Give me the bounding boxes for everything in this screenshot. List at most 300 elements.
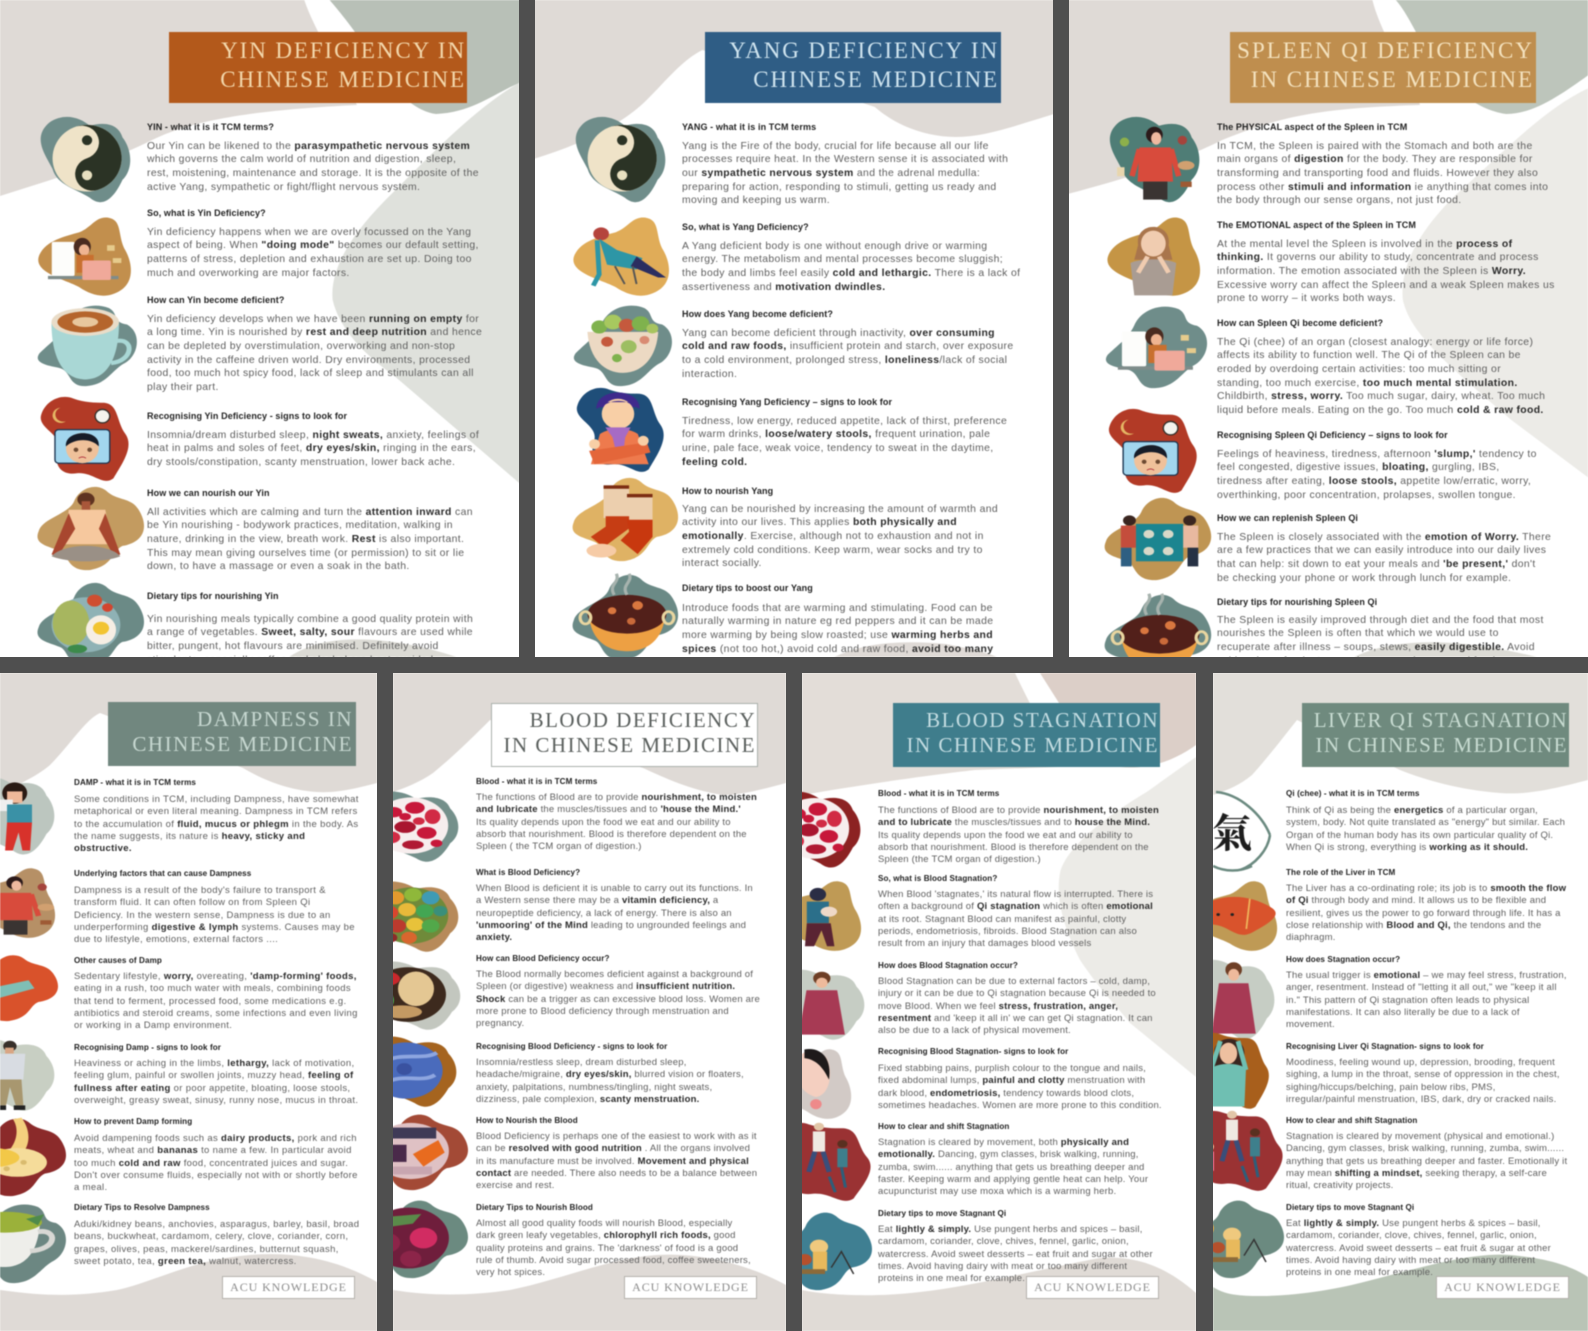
text block: what is blood deficiency: anxiety. bbox=[476, 932, 512, 943]
text block: what it is: Yang is the Fire of the body, crucial for life because all our life bbox=[682, 140, 989, 152]
text block: signs: tiredness after eating, loose stools, appetite low/erratic, worry, bbox=[1217, 476, 1531, 487]
text block: what is yin deficiency: Yin deficiency happens when we are overly focussed on the Yang bbox=[147, 226, 471, 238]
text block: dietary tips: beans, buckwheat, cardamom, celery, clove, coriander, corn, bbox=[74, 1231, 348, 1242]
text block: dietary tips: The Spleen is easily improved through diet and the food that most bbox=[1217, 614, 1544, 626]
text block: what it is bbox=[74, 778, 359, 854]
text block: what it is: Its quality depends upon the food we eat and our ability to bbox=[476, 817, 731, 828]
text block: signs: fullness after eating or poor appetite, bloating, loose stools, bbox=[74, 1083, 350, 1094]
icon: Qi character bbox=[1212, 792, 1270, 870]
text block: how deficient: a long time. Yin is nourished by rest and deep nutrition and hence bbox=[147, 327, 482, 338]
text block: dietary tips: Introduce foods that are warming and stimulating. Food can be bbox=[682, 602, 993, 614]
text block: emotional aspect: thinking. It governs our ability to study, concentrate and process bbox=[1217, 252, 1539, 263]
text block: how occur: resentment and 'keep it all in' we can get Qi stagnation. It can bbox=[878, 1013, 1153, 1024]
text block: what is blood deficiency: 'unmooring' of the Mind leading to ungrounded feelings and bbox=[476, 920, 746, 931]
text block: underlying factors: underperforming digestive & lymph systems. Causes may be bbox=[74, 922, 355, 933]
text block: nourish: Blood Deficiency is perhaps one of the easiest to work with as it bbox=[476, 1131, 757, 1142]
text block: dietary tips: grapes, olives, peas, mackerel/sardines, butternut squash, bbox=[74, 1244, 339, 1255]
text block: dietary tips bbox=[682, 583, 994, 655]
text block: signs: sometimes headaches. Women are more prone to this condition. bbox=[878, 1100, 1162, 1111]
text block: clear and shift: emotionally. Dancing, gym classes, brisk walking, running, bbox=[878, 1149, 1139, 1160]
text block: other causes: or working in a Damp environment. bbox=[74, 1020, 232, 1031]
icon: person sneezing bbox=[0, 777, 54, 854]
text block: signs bbox=[74, 1043, 358, 1106]
text block: other causes bbox=[74, 956, 358, 1031]
text block: signs: irregular/painful menstruation, IBS, dark, dry or cracked nails. bbox=[1286, 1094, 1556, 1105]
icon: family meal table bbox=[1105, 498, 1211, 580]
text block: what is blood stagnation: So, what is Blood Stagnation? bbox=[878, 874, 997, 883]
text block: signs: overthinking, poor concentration, prolapses, swollen tongue. bbox=[1217, 490, 1516, 501]
text block: role of the liver: resilient, gives us the power to go forward through life. It has a bbox=[1286, 908, 1561, 919]
text block: nourish: can be resolved with good nutrition . All the organs involved bbox=[476, 1143, 750, 1154]
text block: other causes: Other causes of Damp bbox=[74, 956, 162, 965]
title: SPLEEN QI DEFICIENCY bbox=[1237, 38, 1534, 63]
icon: woman at desk bbox=[38, 217, 131, 296]
text block: how deficient: Yang can become deficient through inactivity, over consuming bbox=[682, 328, 995, 338]
text block: dietary tips: Dietary tips to boost our Yang bbox=[682, 583, 813, 593]
text block: nourish: How we can nourish our Yin bbox=[147, 488, 270, 498]
text block: nourish: contact are needed. There also needs to be a balance between bbox=[476, 1168, 757, 1179]
title: IN CHINESE MEDICINE bbox=[504, 733, 756, 757]
text block: prevent: Don't over consume fluids, especially not with or shortly before bbox=[74, 1170, 358, 1181]
text block: signs: for warm drinks, loose/watery stools, frequent urination, pale bbox=[682, 429, 990, 440]
text block: how deficient: to a cold environment, prolonged stress, loneliness/lack of social bbox=[682, 355, 1007, 366]
text block: dietary tips: naturally warming in nature eg red peppers and it can be made bbox=[682, 616, 993, 627]
icon: meditation bbox=[37, 487, 144, 570]
icon: man with baby bbox=[772, 881, 861, 951]
text block: other causes: Sedentary lifestyle, worry, overeating, 'damp-forming' foods, bbox=[74, 971, 357, 982]
text block: role of the liver bbox=[1286, 868, 1567, 943]
icon: worried woman bbox=[1107, 217, 1200, 296]
text block: how deficient: Yin deficiency develops when we have been running on empty for bbox=[147, 314, 479, 324]
text block: how deficient: How does Yang become deficient? bbox=[682, 309, 833, 319]
text block: nourish: extremely cold conditions. Keep warm, wear socks and try to bbox=[682, 545, 983, 556]
text block: dietary tips: Dietary tips for nourishing Yin bbox=[147, 591, 279, 601]
text block: replenish: The Spleen is closely associated with the emotion of Worry. There bbox=[1217, 532, 1551, 542]
panel: Yin Deficiency bbox=[0, 0, 519, 657]
text block: how deficient: play their part. bbox=[147, 382, 219, 393]
text block: role of the liver: The role of the Liver in TCM bbox=[1286, 868, 1395, 877]
icon: bananas bbox=[0, 1118, 66, 1196]
text block: dietary tips: Dietary Tips to Nourish Blood bbox=[476, 1203, 593, 1212]
text block: clear and shift: anything that gets us breathing deeper and faster. Emotionally it bbox=[1286, 1156, 1567, 1167]
text block: dietary tips: recuperate after illness – soups, stews, easily digestible. Avoid bbox=[1217, 642, 1535, 653]
text block: signs: Recognising Liver Qi Stagnation- signs to look for bbox=[1286, 1042, 1484, 1051]
text block: what it is: Some conditions in TCM, including Dampness, have somewhat bbox=[74, 794, 359, 805]
text block: what is yin deficiency: much and overworking are major factors. bbox=[147, 268, 350, 279]
text block: other causes: that tend to ferment, processed food, some medications e.g. bbox=[74, 996, 346, 1007]
text block: signs bbox=[1216, 430, 1537, 501]
text block: what it is: Our Yin can be likened to the parasympathetic nervous system bbox=[147, 140, 470, 152]
text block: emotional aspect: information. The emotion associated with the Spleen is Worry. bbox=[1217, 266, 1526, 277]
text block: what it is: Spleen (the TCM organ of digestion.) bbox=[878, 854, 1041, 865]
text block: how deficient: liquid before meals. Eating on the go. Too much cold & raw food. bbox=[1217, 405, 1544, 416]
text block: what it is: absorb that nourishment. Blood is therefore dependent on the bbox=[878, 842, 1149, 853]
text block: how occur: The Blood normally becomes deficient against a background of bbox=[476, 969, 753, 980]
text block: signs: dark blood, endometriosis, tendency towards blood clots, bbox=[878, 1088, 1134, 1099]
text block: what it is: to the accumulation of fluid, mucus or phlegm in the body. As bbox=[74, 819, 358, 830]
text block: what is blood deficiency: a Western sense there may be a vitamin deficiency, a bbox=[476, 895, 718, 906]
text block: how deficient bbox=[146, 295, 482, 393]
text block: what it is: moving and keeping us warm. bbox=[682, 195, 830, 206]
text block: how occur: movement. bbox=[1286, 1019, 1335, 1030]
text block: what it is: obstructive. bbox=[74, 843, 132, 854]
text block: what it is bbox=[1286, 789, 1565, 853]
text block: underlying factors: transform fluid. It can often follow on from Spleen Qi bbox=[74, 897, 310, 908]
text block: what it is: Blood - what it is in TCM terms bbox=[476, 777, 597, 786]
text block: dietary tips: rule of thumb. Avoid sugar processed food, coffee sweeteners, bbox=[476, 1255, 751, 1266]
text block: dietary tips: cardamom, coriander, clove, chives, fennel, garlic, onion, bbox=[878, 1236, 1129, 1247]
panel: Dampness bbox=[0, 673, 377, 1331]
text block: dietary tips bbox=[1286, 1201, 1571, 1280]
text block: dietary tips bbox=[146, 591, 473, 657]
text block: what it is: preparing for action, responding to stimuli, getting us ready and bbox=[682, 182, 997, 193]
text block: signs: Recognising Spleen Qi Deficiency – signs to look for bbox=[1217, 430, 1448, 440]
text block: what it is: the name suggests, its nature is heavy, sticky and bbox=[74, 831, 305, 842]
text block: how deficient: cold and raw foods, insufficient protein and starch, over exposure bbox=[682, 341, 1013, 352]
text block: what is yin deficiency bbox=[146, 208, 479, 279]
text block: clear and shift bbox=[1286, 1114, 1571, 1193]
panel: Liver Qi Stagnation bbox=[1213, 673, 1588, 1331]
text block: signs: Moodiness, feeling wound up, depression, brooding, frequent bbox=[1286, 1057, 1555, 1068]
text block: nourish: be Yin nourishing - bodywork practices, meditation, walking in bbox=[147, 520, 453, 531]
text block: dietary tips: times. Avoid having dairy with meat or too many different bbox=[1286, 1255, 1535, 1266]
icon: stew pot bbox=[1105, 594, 1211, 680]
text block: dietary tips: very hot spices. bbox=[476, 1267, 545, 1278]
icon: nourishing meal bbox=[37, 583, 144, 666]
icon: stressed woman bbox=[1192, 1033, 1269, 1109]
title bbox=[1230, 32, 1536, 103]
icon: food bowl bbox=[364, 961, 460, 1030]
title: BLOOD DEFICIENCY bbox=[530, 708, 756, 732]
icon: dancers bbox=[772, 1123, 871, 1201]
title: YIN DEFICIENCY IN bbox=[221, 38, 466, 63]
text block: nourish: Yang can be nourished by increasing the amount of warmth and bbox=[682, 504, 998, 514]
text block: clear and shift: ritual, creativity projects. bbox=[1286, 1180, 1394, 1191]
text block: clear and shift: Dancing, gym classes, brisk walking, running, zumba, swim...... bbox=[1286, 1143, 1564, 1154]
text block: role of the liver: The Liver has a co-ordinating role; its job is to smooth the flow bbox=[1286, 883, 1566, 894]
text block: nourish bbox=[682, 486, 998, 569]
text block: what it is: and to lubricate the muscles/tissues and to house the Mind. bbox=[878, 817, 1150, 828]
text block: dietary tips: spices (not too hot,) avoid cold and raw food, avoid too many bbox=[682, 644, 993, 655]
text block: clear and shift: How to clear and shift Stagnation bbox=[1286, 1116, 1417, 1125]
icon: woman bbox=[1186, 960, 1274, 1039]
text block: what it is bbox=[878, 789, 1159, 865]
icon: blood cells bbox=[772, 792, 860, 868]
text block: what is yang deficiency: energy. The metabolism and mental processes become sluggish; bbox=[682, 254, 1003, 265]
icon: yin yang bbox=[576, 116, 666, 202]
text block: what it is: Organ of the human body has its own particular quality of Qi. bbox=[1286, 830, 1553, 841]
text block: what it is: processes require heat. In the Western sense it is associated with bbox=[682, 154, 1008, 165]
icon: herbs and spices bbox=[1185, 1201, 1284, 1278]
text block: signs: overweight, greasy sweat, sinusy, runny nose, mucus in throat. bbox=[74, 1095, 358, 1106]
text block: dietary tips: Almost all good quality foods will nourish Blood, especially bbox=[476, 1218, 732, 1229]
text block: role of the liver: close relationship with Blood and Qi, the tendons and the bbox=[1286, 920, 1541, 931]
text block: what is yang deficiency: So, what is Yang Deficiency? bbox=[682, 222, 809, 232]
text block: how deficient: affects its ability to function well. The Qi of the Spleen can be bbox=[1217, 350, 1521, 361]
panel: Yang Deficiency bbox=[535, 0, 1053, 657]
text block: signs: dry stools/constipation, scanty menstruation, lower back ache. bbox=[147, 457, 455, 468]
text block: what is blood stagnation bbox=[878, 874, 1154, 949]
text block: how occur: How does Stagnation occur? bbox=[1286, 955, 1400, 964]
text block: dietary tips: watercress. Avoid sweet desserts – eat fruit and sugar at other bbox=[878, 1249, 1153, 1260]
icon: woman bbox=[0, 868, 55, 938]
logo box bbox=[222, 1276, 355, 1299]
text block: what is blood deficiency: When Blood is deficient it is unable to carry out its functions. In bbox=[476, 883, 753, 894]
text block: signs: feeling cold. bbox=[682, 457, 747, 468]
text block: clear and shift: zumba, swim...... anything that gets us breathing deeper and bbox=[878, 1162, 1145, 1173]
text block: how occur: manifestations. It can also literally be due to a lack of bbox=[1286, 1007, 1520, 1018]
text block: dietary tips: proteins in one meal for example. bbox=[1286, 1267, 1433, 1278]
text block: prevent: too much cold and raw food, concentrated juices and sugar. bbox=[74, 1158, 348, 1169]
icon: woman at desk bbox=[1106, 307, 1207, 388]
text block: what is blood stagnation: result from an injury that damages blood vessels bbox=[878, 938, 1091, 949]
icon: dancers bbox=[1186, 1111, 1283, 1191]
icon: overweight man bbox=[0, 1039, 54, 1111]
text block: dietary tips bbox=[1216, 597, 1544, 657]
title: CHINESE MEDICINE bbox=[753, 66, 999, 92]
text block: clear and shift: How to clear and shift Stagnation bbox=[878, 1122, 1009, 1131]
icon: people in gym bbox=[363, 1115, 468, 1190]
text block: what it is: Its quality depends upon the food we eat and our ability to bbox=[878, 830, 1133, 841]
text block: what it is: which governs the calm world of nutrition and digestion, sleep, bbox=[147, 154, 456, 165]
text block: how occur: injury or it can be due to Qi stagnation because Qi is needed to bbox=[878, 988, 1156, 999]
text block: underlying factors bbox=[74, 869, 355, 945]
text block: signs: Recognising Blood Stagnation- signs to look for bbox=[878, 1047, 1068, 1056]
text block: clear and shift: Stagnation is cleared by movement (physical and emotional.) bbox=[1286, 1131, 1554, 1142]
text block: dietary tips: dark green leafy vegetables, chlorophyll rich foods, good bbox=[476, 1230, 736, 1241]
text block: what it is: YANG - what it is in TCM terms bbox=[682, 122, 816, 132]
icon: Qi character: 氣 bbox=[1213, 802, 1252, 859]
text block: what is blood stagnation: When Blood 'stagnates,' its natural flow is interrupted. There is bbox=[878, 889, 1153, 900]
text block: role of the liver: diaphragm. bbox=[1286, 932, 1336, 943]
panel: Spleen Qi Deficiency bbox=[1069, 0, 1588, 657]
text block: how occur bbox=[1286, 955, 1567, 1030]
logo box bbox=[1026, 1276, 1159, 1299]
text block: signs bbox=[146, 411, 480, 468]
text block: signs: Feelings of heaviness, tiredness, afternoon 'slump,' tendency to bbox=[1217, 448, 1537, 460]
title: LIVER QI STAGNATION bbox=[1314, 708, 1568, 732]
text block: nourish: interact socially. bbox=[682, 558, 762, 569]
text block: how deficient: interaction. bbox=[682, 369, 737, 380]
text block: signs bbox=[476, 1042, 744, 1105]
text block: how occur: pregnancy. bbox=[476, 1018, 524, 1029]
text block: signs: sighing, a lump in the throat, sense of oppression in the chest, bbox=[1286, 1069, 1560, 1080]
text block: what is blood deficiency: What is Blood Deficiency? bbox=[476, 868, 580, 877]
text block: what is blood stagnation: often a background of Qi stagnation which is often emotional bbox=[878, 901, 1153, 912]
text block: prevent: Avoid dampening foods such as dairy products, pork and rich bbox=[74, 1133, 357, 1144]
title: IN CHINESE MEDICINE bbox=[1316, 733, 1568, 757]
text block: signs: sighing/hiccups/belching, pain below ribs, PMS, bbox=[1286, 1082, 1496, 1093]
text block: what it is: Think of Qi as being the energetics of a particular organ, bbox=[1286, 805, 1538, 816]
icon: herbs and spices bbox=[771, 1213, 872, 1290]
title bbox=[169, 32, 467, 103]
text block: how occur: more prone to Blood deficiency through menstruation and bbox=[476, 1006, 729, 1017]
text block: prevent bbox=[74, 1117, 358, 1193]
icon: tired woman bbox=[573, 217, 669, 296]
text block: clear and shift: acupuncturist may use moxa which is a warming herb. bbox=[878, 1186, 1116, 1197]
icon: red blood cells bbox=[364, 792, 458, 862]
text block: how deficient bbox=[1216, 318, 1545, 416]
text block: how occur: Spleen (or digestive) weakness and insufficient nutrition. bbox=[476, 981, 735, 992]
text block: how deficient: How can Spleen Qi become deficient? bbox=[1217, 318, 1383, 328]
text block: nourish: activity into our lives. This applies both physically and bbox=[682, 517, 957, 528]
text block: signs bbox=[878, 1047, 1162, 1111]
text block: signs: dizziness, pale complexion, scanty menstruation. bbox=[476, 1094, 699, 1105]
text block: what it is: system, body. Not quite translated as "energy" but similar. Each bbox=[1286, 817, 1565, 828]
text block: dietary tips: Eat lightly & simply. Use pungent herbs & spices – basil, bbox=[1286, 1218, 1541, 1229]
text block: signs: Fixed stabbing pains, purplish colour to the tongue and nails, bbox=[878, 1063, 1146, 1074]
text block: how occur: anger, resentment. Instead of "letting it all out," we "keep it all bbox=[1286, 982, 1557, 993]
text block: dietary tips: cardamom, coriander, clove, chives, fennel, garlic, onion, bbox=[1286, 1230, 1537, 1241]
text block: how deficient: The Qi (chee) of an organ (closest analogy: energy or life force) bbox=[1217, 336, 1533, 348]
icon: colourful vitamins bbox=[364, 882, 458, 952]
text block: dietary tips: Aduki/kidney beans, anchovies, asparagus, barley, basil, broad bbox=[74, 1219, 359, 1230]
text block: what it is: Blood - what it is in TCM terms bbox=[878, 789, 999, 798]
panel: Blood Stagnation bbox=[802, 673, 1196, 1331]
title: BLOOD STAGNATION bbox=[926, 708, 1159, 732]
text block: signs bbox=[682, 397, 1007, 468]
text block: signs: Heaviness or aching in the limbs, lethargy, lack of motivation, bbox=[74, 1058, 354, 1069]
icon: woman with foods bbox=[1110, 117, 1199, 202]
text block: signs: Insomnia/dream disturbed sleep, night sweats, anxiety, feelings of bbox=[147, 430, 479, 440]
text block: dietary tips: proteins in one meal for example. bbox=[878, 1273, 1025, 1284]
text block: clear and shift: may mean shifting a mindset, seeking therapy, a self-care bbox=[1286, 1168, 1547, 1179]
text block: signs: heat in palms and soles of feet, dry eyes/skin, ringing in the ears, bbox=[147, 443, 476, 454]
text block: nourish: nature, drinking in the view, breath work. Rest is also important. bbox=[147, 534, 464, 545]
icon: woman in pain bbox=[772, 970, 864, 1040]
icon: reclining figure bbox=[0, 955, 58, 1021]
text block: prevent: meats, wheat and bananas to name a few. In particular avoid bbox=[74, 1145, 352, 1156]
icon: liver bbox=[1192, 881, 1277, 951]
text block: how deficient: How can Yin become deficient? bbox=[147, 295, 284, 305]
text block: dietary tips: watercress. Avoid sweet desserts – eat fruit & sugar at other bbox=[1286, 1243, 1551, 1254]
text block: how deficient: eroded by overdoing certain activities: too much sitting or bbox=[1217, 364, 1501, 375]
text block: dietary tips: Eat lightly & simply. Use pungent herbs and spices – basil, bbox=[878, 1224, 1143, 1235]
text block: underlying factors: due to lifestyle, emotions, external factors .... bbox=[74, 934, 278, 945]
text block: how deficient: activity in the caffeine driven world. Dry environments, processed bbox=[147, 355, 470, 366]
text block: what it is: The functions of Blood are to provide nourishment, to moisten bbox=[878, 805, 1159, 816]
text block: what it is bbox=[682, 122, 1008, 206]
text block: underlying factors: Underlying factors that can cause Dampness bbox=[74, 869, 251, 878]
text block: how occur bbox=[476, 954, 760, 1029]
title bbox=[1302, 703, 1569, 767]
text block: how occur: move Blood. When we feel stress, frustration, anger, bbox=[878, 1001, 1118, 1012]
text block: dietary tips: Yin nourishing meals typically combine a good quality protein with bbox=[147, 614, 473, 624]
text block: what is yang deficiency bbox=[682, 222, 1020, 293]
text block: what it is: absorb that nourishment. Blood is therefore dependent on the bbox=[476, 829, 747, 840]
text block: nourish: How to Nourish the Blood bbox=[476, 1116, 578, 1125]
title: CHINESE MEDICINE bbox=[220, 66, 466, 92]
text block: clear and shift bbox=[878, 1122, 1148, 1197]
icon: woman with headache bbox=[771, 1049, 851, 1119]
text block: how occur: How does Blood Stagnation occur? bbox=[878, 961, 1018, 970]
text block: clear and shift: Stagnation is cleared by movement, both physically and bbox=[878, 1137, 1129, 1148]
text block: nourish: This may mean giving ourselves time (or permission) to sit or lie bbox=[147, 548, 464, 559]
text block: physical aspect: transforming and transporting food and fluids. However they also bbox=[1217, 168, 1538, 179]
text block: dietary tips: more warming by being slow roasted; use warming herbs and bbox=[682, 630, 993, 641]
text block: what it is: Qi (chee) - what it is in TCM terms bbox=[1286, 789, 1419, 798]
text block: nourish: exercise and rest. bbox=[476, 1180, 555, 1191]
text block: how deficient: food, too much hot spicy food, lack of sleep and stimulants can all bbox=[147, 368, 474, 379]
text block: what is yin deficiency: So, what is Yin Deficiency? bbox=[147, 208, 266, 218]
logo box bbox=[1436, 1276, 1569, 1299]
text block: what is blood stagnation: at its root. Stagnant Blood can manifest as painful, clotty bbox=[878, 914, 1126, 925]
text block: how deficient: Childbirth, stress, worry. Too much sugar, dairy, wheat. Too much bbox=[1217, 391, 1545, 402]
text block: what it is: rest, moistening, maintenance and storage. It is the opposite of the bbox=[147, 168, 479, 179]
text block: how occur: also be due to a lack of physical movement. bbox=[878, 1025, 1071, 1036]
title: CHINESE MEDICINE bbox=[132, 732, 353, 756]
text block: dietary tips bbox=[74, 1203, 360, 1267]
title bbox=[491, 703, 758, 767]
text block: what it is bbox=[146, 122, 479, 193]
text block: what is yang deficiency: assertiveness and motivation dwindles. bbox=[682, 282, 885, 293]
text block: nourish: How to nourish Yang bbox=[682, 486, 773, 496]
text block: nourish: All activities which are calming and turn the attention inward can bbox=[147, 506, 473, 518]
text block: emotional aspect: At the mental level the Spleen is involved in the process of bbox=[1217, 238, 1512, 250]
logo box: ACU KNOWLEDGE bbox=[230, 1280, 347, 1294]
text block: signs: urine, pale face, weak voice, tendency to sweat in the daytime, bbox=[682, 443, 994, 454]
icon: coffee cup bbox=[38, 306, 137, 386]
text block: dietary tips: times. Avoid having dairy with meat or too many different bbox=[878, 1261, 1127, 1272]
text block: signs: anxiety, palpitations, numbness/tingling, night sweats, bbox=[476, 1082, 712, 1093]
text block: what is yin deficiency: aspect of being. When "doing mode" becomes our default setting, bbox=[147, 240, 479, 251]
text block: signs bbox=[1286, 1042, 1560, 1105]
text block: signs: headache/migraine, dry eyes/skin, blurred vision or floaters, bbox=[476, 1069, 744, 1080]
text block: physical aspect: In TCM, the Spleen is paired with the Stomach and both are the bbox=[1217, 140, 1533, 152]
title bbox=[705, 32, 1001, 103]
text block: signs: Recognising Yin Deficiency - signs to look for bbox=[147, 411, 347, 421]
text block: underlying factors: Dampness is a result of the body's failure to transport & bbox=[74, 885, 326, 896]
text block: replenish: that can help: sit down to eat your meals and 'be present,' don't bbox=[1217, 559, 1536, 570]
text block: dietary tips: Dietary tips for nourishing Spleen Qi bbox=[1217, 597, 1377, 607]
text block: replenish: are a few practices that we can easily introduce into our daily lives bbox=[1217, 545, 1546, 556]
text block: emotional aspect bbox=[1216, 220, 1555, 304]
text block: what is blood deficiency bbox=[475, 868, 753, 943]
text block: dietary tips: sweet potato, tea, green tea, walnut, watercress. bbox=[74, 1256, 297, 1267]
logo box bbox=[624, 1276, 757, 1299]
icon: stew pot bbox=[573, 574, 678, 660]
text block: physical aspect: process other stimuli and information ie anything that comes into bbox=[1217, 182, 1548, 193]
text block: how deficient bbox=[682, 309, 1014, 380]
title: YANG DEFICIENCY IN bbox=[729, 38, 999, 63]
text block: what it is: active Yang, sympathetic or fight/flight nervous system. bbox=[147, 182, 420, 193]
icon: beetroot bbox=[363, 1201, 468, 1278]
text block: replenish: How we can replenish Spleen Qi bbox=[1217, 513, 1358, 523]
panel: Blood Deficiency bbox=[393, 673, 786, 1331]
text block: dietary tips: Dietary tips to move Stagnant Qi bbox=[1286, 1203, 1414, 1212]
text block: replenish bbox=[1216, 513, 1551, 584]
icon: blue eye bbox=[364, 1037, 456, 1107]
text block: how occur: Shock can be a trigger as can excessive blood loss. Women are bbox=[476, 994, 760, 1005]
text block: signs: Recognising Damp - signs to look for bbox=[74, 1043, 221, 1052]
text block: prevent: How to prevent Damp forming bbox=[74, 1117, 192, 1126]
icon: salad bowl bbox=[574, 306, 672, 386]
text block: replenish: be checking your phone or work through lunch for example. bbox=[1217, 573, 1511, 584]
text block: dietary tips: Dietary Tips to Resolve Dampness bbox=[74, 1203, 210, 1212]
text block: signs: fixed abdominal lumps, painful and clotty menstruation with bbox=[878, 1075, 1145, 1086]
text block: physical aspect bbox=[1216, 122, 1548, 206]
text block: physical aspect: the body through our sense organs, not just food. bbox=[1217, 195, 1462, 206]
text block: physical aspect: main organs of digestion for the body. They are responsible for bbox=[1217, 154, 1533, 165]
text block: signs: Insomnia/restless sleep, dream disturbed sleep, bbox=[476, 1057, 687, 1068]
text block: dietary tips: nourishes the Spleen is often that which we would use to bbox=[1217, 628, 1499, 639]
text block: signs: feeling glum, painful or swollen joints, muzzy head, feeling of bbox=[74, 1070, 354, 1081]
icon: yin yang bbox=[41, 116, 131, 202]
text block: dietary tips bbox=[476, 1203, 751, 1278]
title bbox=[893, 703, 1160, 767]
text block: what it is: and lubricate the muscles/tissues and to 'house the Mind.' bbox=[476, 804, 741, 815]
text block: emotional aspect: The EMOTIONAL aspect of the Spleen in TCM bbox=[1217, 220, 1416, 230]
